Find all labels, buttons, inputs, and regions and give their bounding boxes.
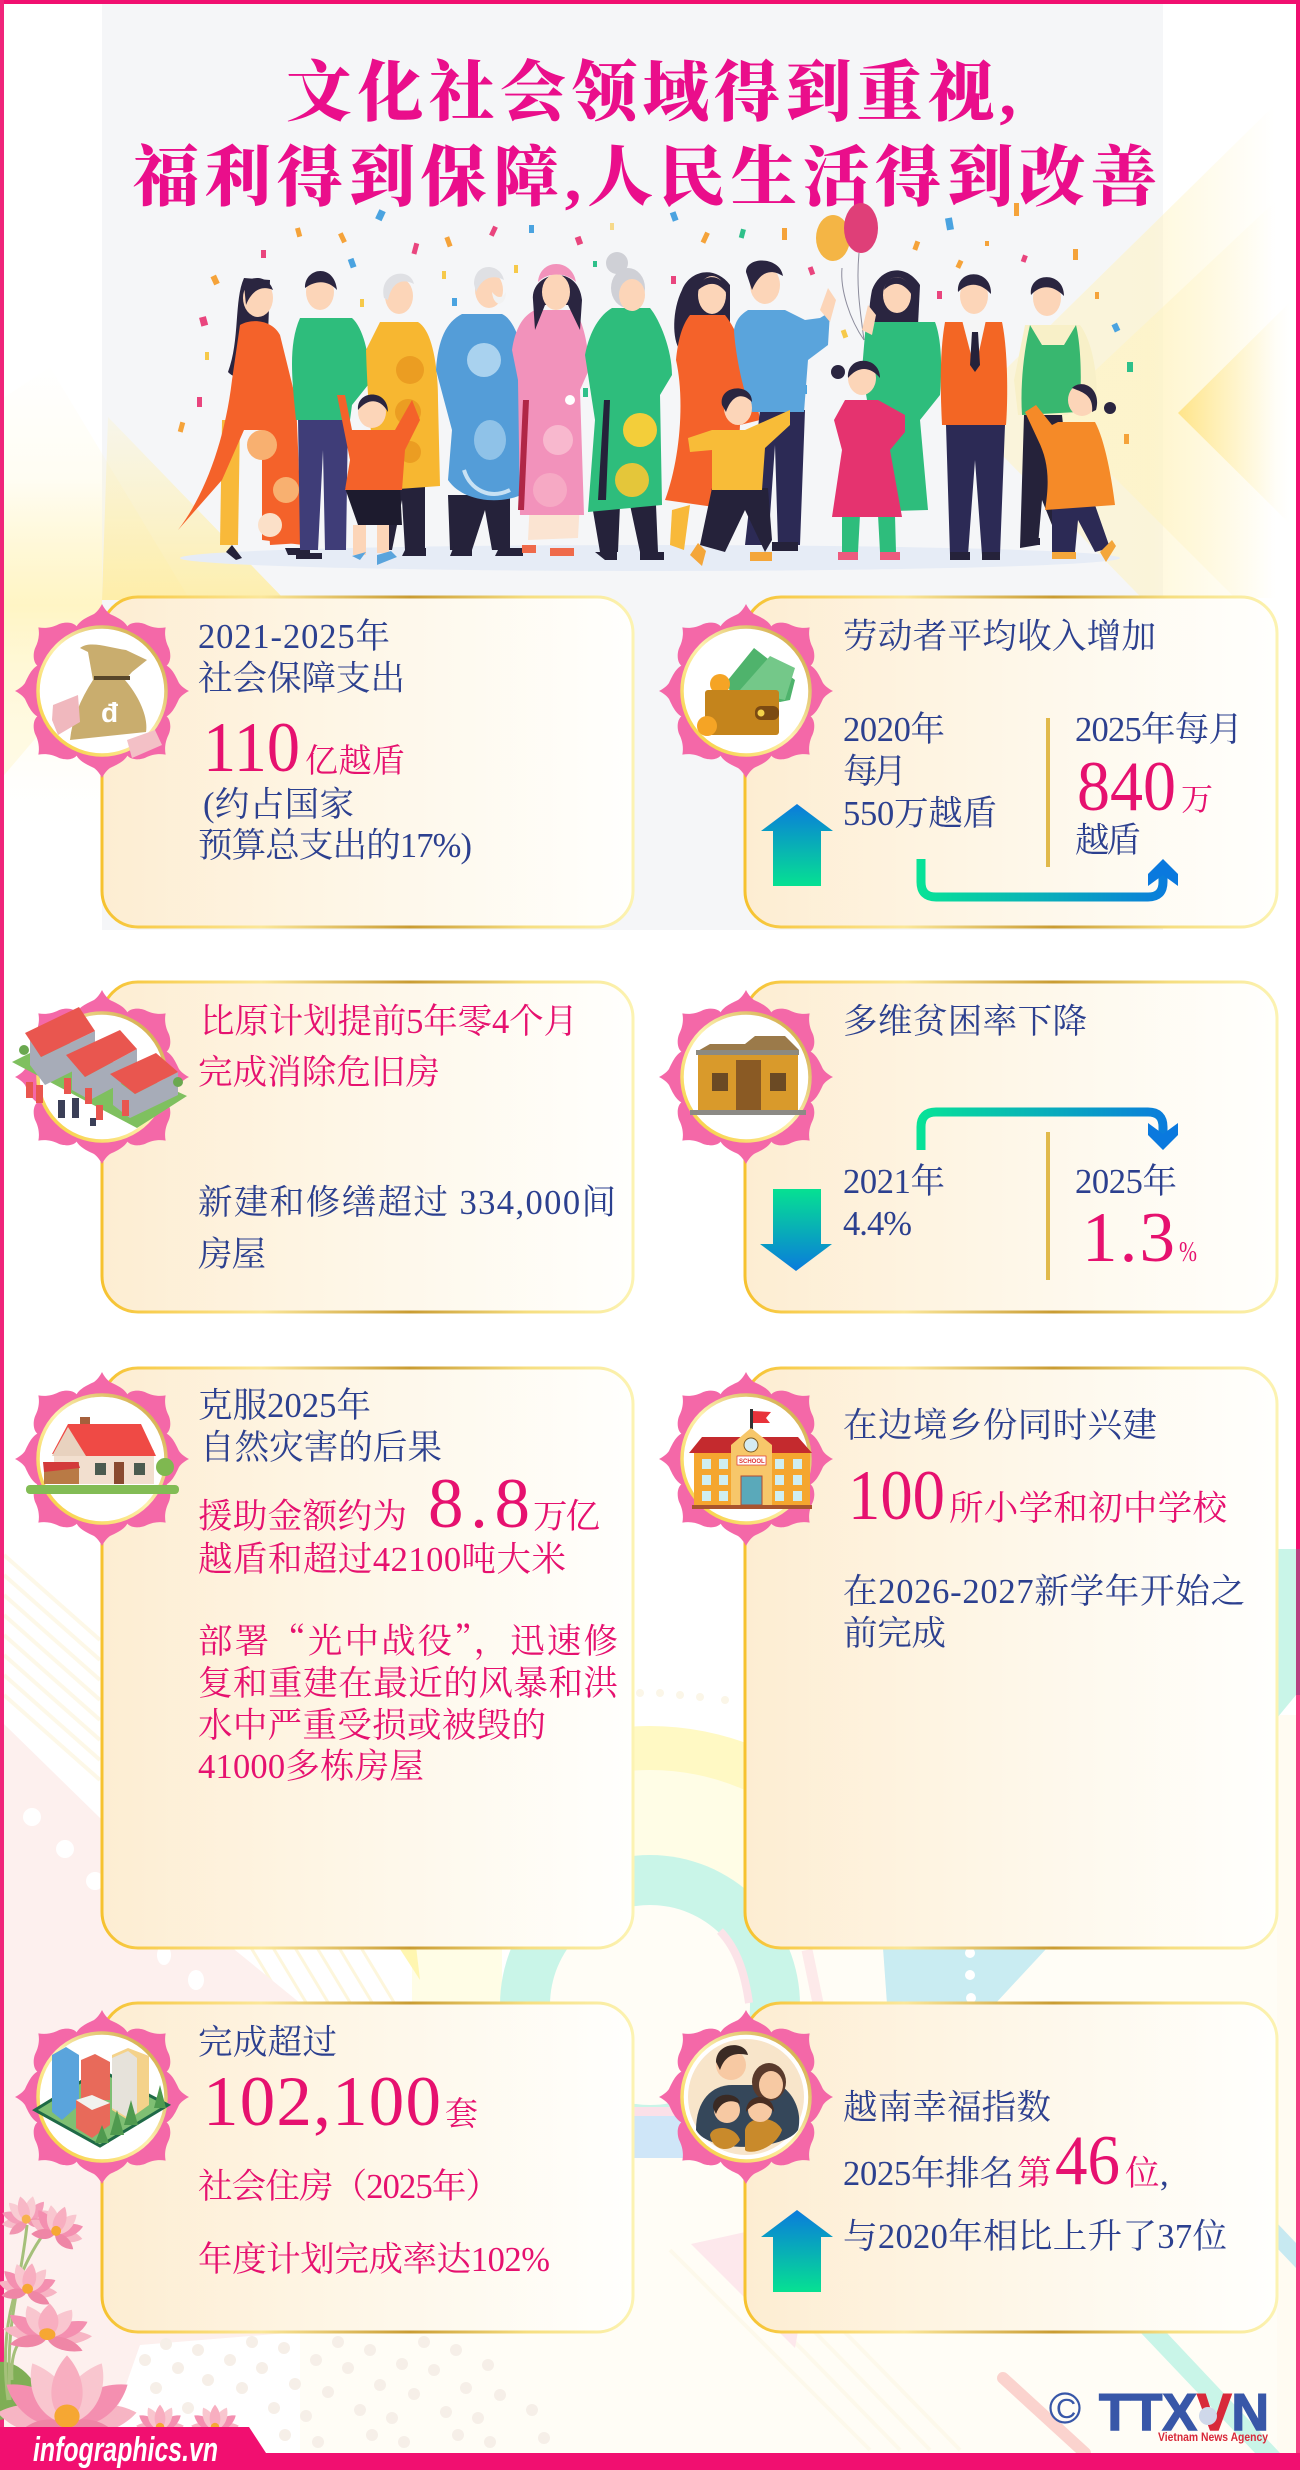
text: heading: 在边境乡份同时兴建	[843, 1407, 1157, 1445]
right yellow rays	[1004, 134, 1276, 598]
text: share of budget	[198, 786, 472, 865]
icon: happy family	[659, 2010, 833, 2184]
text: heading: 越南幸福指数	[843, 2089, 1051, 2127]
text: 2025 income: 2025年每月	[1075, 711, 1243, 749]
arrow: connector from 2021 to 2025	[921, 1112, 1178, 1150]
text: 2020 income: 550万越盾	[843, 795, 997, 833]
text: 2025 rate	[1075, 1163, 1197, 1277]
right edge shapes	[1277, 1549, 1296, 1718]
text: 2025 rate: %	[1179, 1237, 1197, 1268]
icon: old house	[659, 990, 833, 1164]
text: 2025 ranking: 46	[1055, 2122, 1120, 2200]
person: woman in orange ao dai	[178, 278, 310, 560]
arrow: down	[760, 1189, 832, 1271]
left yellow rays	[0, 367, 190, 780]
logo: TTXVN copyright: TTXVN	[1099, 2384, 1269, 2442]
text: 2025 income: 万	[1181, 781, 1213, 817]
lower pastel field	[547, 1904, 1300, 2470]
text: Quang Trung campaign: 复和重建在最近的风暴和洪	[198, 1665, 618, 1703]
illustration: family group with balloons and confetti	[178, 203, 1133, 571]
panel: natural disaster recovery	[15, 1368, 633, 1948]
footer site name: infographics.vn	[33, 2431, 218, 2469]
text: heading: 比原计划提前5年零4个月	[200, 1003, 578, 1041]
icon: red-roofed house	[15, 1372, 189, 1546]
text: 2025 income: 840	[1077, 748, 1176, 826]
text: heading: 劳动者平均收入增加	[843, 618, 1156, 656]
person: child in orange-red shirt	[337, 394, 420, 565]
title: 文化社会领域得到重视,	[286, 57, 1016, 130]
text: 2025 ranking: 2025年排名	[843, 2155, 1014, 2193]
person: elderly man in yellow robe	[366, 274, 440, 556]
text: heading: 自然灾害的后果	[200, 1429, 442, 1467]
figure: 100 schools: 所小学和初中学校	[949, 1490, 1228, 1528]
text: 2025 income: 越盾	[1075, 822, 1141, 860]
text: 2021 rate: 4.4%	[843, 1205, 912, 1243]
text: completion deadline: 前完成	[843, 1615, 946, 1653]
text: Quang Trung campaign: 41000多栋房屋	[198, 1748, 424, 1786]
text: heading: 完成超过	[198, 2024, 337, 2062]
text: heading	[198, 1003, 578, 1092]
ground shadow	[180, 545, 1120, 571]
panel: social security spending	[15, 597, 633, 927]
text: aid amount: 越盾和超过42100吨大米	[198, 1541, 566, 1579]
arrow: up	[761, 2210, 833, 2292]
icon: money bag	[15, 604, 189, 778]
footer bar	[0, 2427, 1300, 2470]
figure: 110: 亿越盾	[305, 743, 405, 780]
title: 福利得到保障,人民生活得到改善	[133, 142, 1157, 215]
pink left field	[4, 1724, 300, 2430]
person: elderly man in blue robe	[436, 267, 530, 556]
person: grandmother in green ao dai	[585, 252, 672, 560]
icon: money bag: đ	[101, 697, 118, 728]
text: completion deadline	[843, 1573, 1245, 1653]
text: aid amount: 万亿	[533, 1498, 600, 1536]
person: boy in yellow shirt	[688, 388, 790, 566]
person: man in green vest	[1014, 277, 1097, 548]
figure: 110: 110	[203, 709, 300, 787]
logo: TTXVN copyright: C	[1056, 2393, 1076, 2424]
text: heading: 完成消除危旧房	[198, 1054, 440, 1092]
arrow: connector from 2020 to 2025	[921, 859, 1178, 897]
panel: worker income	[659, 597, 1277, 927]
panel: housing replacement	[12, 982, 633, 1312]
divider	[1046, 1132, 1050, 1280]
text: aid amount: 援助金额约为	[198, 1498, 407, 1536]
text: houses built: 新建和修缮超过 334,000间	[198, 1184, 616, 1222]
text: plan completion: 年度计划完成率达102%	[198, 2241, 550, 2279]
panel: border schools	[659, 1368, 1277, 1948]
figure: 110	[203, 709, 405, 787]
text: completion deadline: 在2026-2027新学年开始之	[843, 1573, 1245, 1611]
text: Quang Trung campaign: 部署“光中战役”，迅速修	[198, 1613, 618, 1663]
text: 2025 ranking: 第	[1017, 2155, 1052, 2193]
decoration: lotus flowers	[0, 2190, 240, 2454]
panel: happiness index	[659, 2003, 1277, 2332]
text: aid amount: 8.8	[428, 1465, 530, 1543]
text: 2025 ranking	[843, 2122, 1169, 2200]
figure: 102,100 units: 102,100	[203, 2063, 441, 2141]
figure: 100 schools: 100	[848, 1457, 945, 1535]
person: man in green shirt	[292, 271, 369, 559]
text: 2025 income	[1075, 711, 1243, 860]
person: girl in pink dress	[831, 361, 905, 560]
arrow: up	[761, 804, 833, 886]
text: 2021 rate	[843, 1163, 945, 1243]
text: heading: 多维贫困率下降	[843, 1003, 1087, 1041]
divider	[1046, 718, 1050, 867]
person: woman in orange dress	[665, 272, 760, 550]
text: 2025 ranking: 位	[1125, 2155, 1160, 2193]
panel: multidimensional poverty	[659, 982, 1277, 1312]
panel: social housing	[15, 2003, 633, 2332]
panel: social security spending: 社会保障支出	[198, 660, 405, 698]
figure: 102,100 units: 套	[445, 2096, 478, 2133]
confetti	[178, 203, 1133, 444]
icon: rows of houses	[12, 990, 189, 1164]
person: woman in green dress with balloons	[860, 270, 941, 512]
icon: school: SCHOOL	[739, 1459, 765, 1465]
text: Quang Trung campaign	[198, 1613, 618, 1786]
text: 2020 income: 2020年	[843, 711, 945, 749]
balloons	[816, 203, 878, 340]
text: houses built	[198, 1184, 616, 1274]
person: woman in pink ao dai	[512, 264, 588, 556]
text: social housing 2025: 社会住房（2025年）	[198, 2158, 500, 2208]
icon: apartment blocks	[15, 2010, 189, 2184]
mid-gap bands	[633, 2107, 713, 2116]
text: aid amount	[198, 1465, 600, 1579]
logo: TTXVN copyright: Vietnam News Agency	[1158, 2430, 1268, 2444]
icon: school	[659, 1372, 833, 1546]
text: heading: 克服2025年	[198, 1387, 371, 1425]
text: share of budget: 预算总支出的17%)	[198, 827, 472, 865]
figure: 100 schools	[848, 1457, 1228, 1535]
person: man in orange vest	[941, 274, 1007, 560]
text: Quang Trung campaign: 水中严重受损或被毁的	[198, 1707, 546, 1745]
text: 2025 ranking: ,	[1160, 2155, 1169, 2193]
text: 2020 income: 每月	[843, 753, 907, 791]
person: man in blue shirt	[734, 260, 836, 551]
text: 2025 rate: 2025年	[1075, 1163, 1177, 1201]
text: 2021 rate: 2021年	[843, 1163, 945, 1201]
text: 2020 income	[843, 711, 997, 833]
text: heading	[198, 1387, 442, 1467]
text: houses built: 房屋	[198, 1236, 266, 1274]
text: 2025 rate: 1.3	[1082, 1199, 1175, 1277]
text: heading: 2021-2025年	[198, 618, 390, 656]
text: rise since 2020: 与2020年相比上升了37位	[843, 2218, 1227, 2256]
person: girl in orange dress	[1025, 384, 1116, 562]
text: share of budget: (约占国家	[203, 786, 354, 824]
title	[133, 57, 1157, 215]
icon: wallet	[659, 604, 833, 778]
